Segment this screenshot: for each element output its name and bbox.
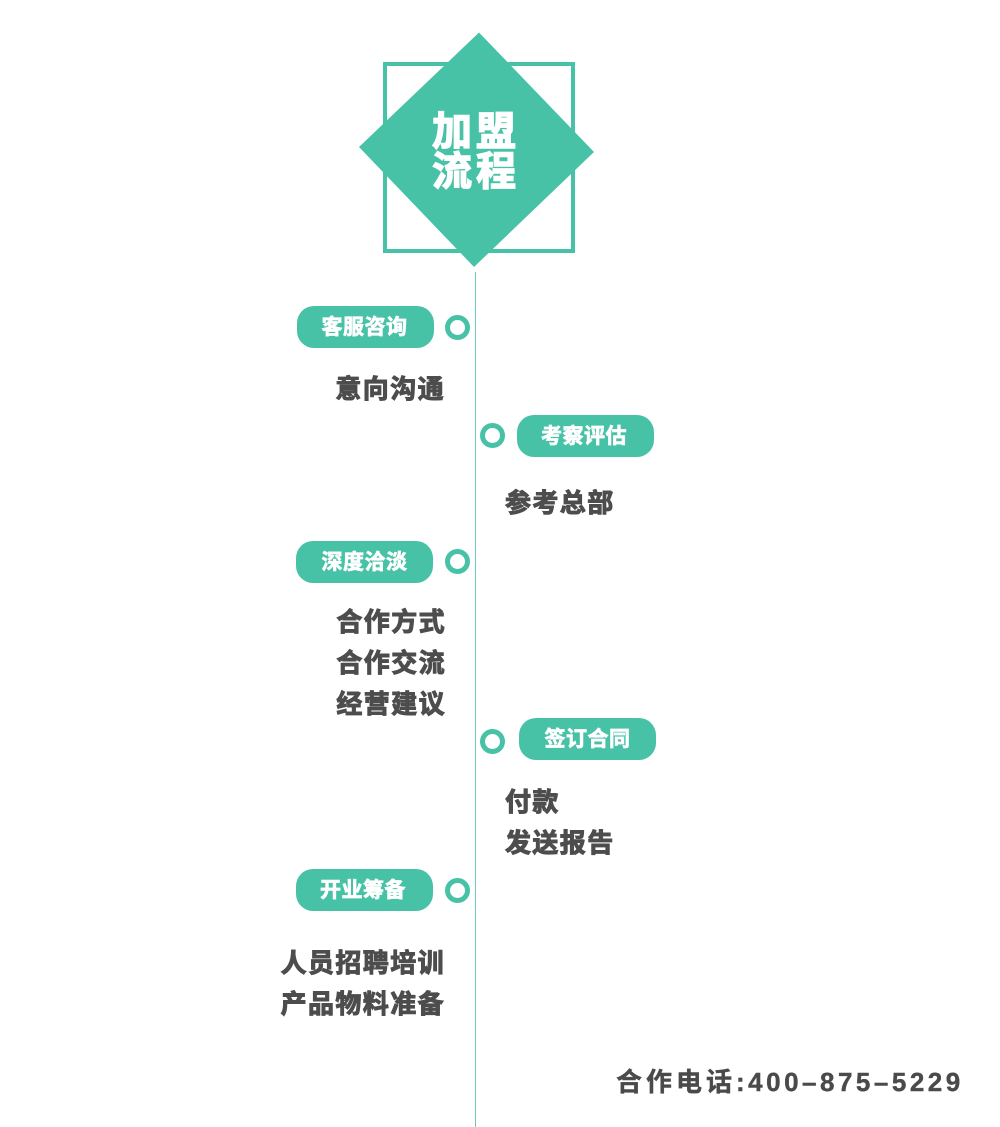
title: 流程 <box>432 150 520 194</box>
title badge <box>359 32 594 267</box>
step 5 text: 人员招聘培训 <box>281 948 445 978</box>
step 1 text: 意向沟通 <box>335 374 445 404</box>
step 4 pill <box>519 718 656 760</box>
step 4 text <box>504 787 615 858</box>
step 3 pill <box>296 541 433 583</box>
center timeline line <box>475 272 476 1127</box>
title: 加盟 <box>432 110 520 154</box>
step 5 dot <box>445 878 470 903</box>
step 4 text: 付款 <box>505 787 560 817</box>
step 5 text: 产品物料准备 <box>281 989 445 1019</box>
step 3 text: 合作交流 <box>336 648 446 678</box>
step 3 text: 经营建议 <box>336 689 446 719</box>
step 5 text <box>280 948 445 1019</box>
step 2 text: 参考总部 <box>505 488 615 518</box>
contact phone: 合作电话:400–875–5229 <box>616 1067 964 1097</box>
step 3 text: 合作方式 <box>336 607 446 637</box>
step 1 dot <box>445 315 470 340</box>
step 3 pill: 深度洽淡 <box>322 551 408 574</box>
step 2 pill <box>517 415 654 457</box>
step 4 pill: 签订合同 <box>544 728 630 751</box>
title <box>432 110 520 194</box>
step 4 dot <box>480 729 505 754</box>
step 2 dot <box>480 423 505 448</box>
step 3 text <box>336 607 446 719</box>
step 1 pill <box>297 306 434 348</box>
step 5 pill: 开业筹备 <box>320 879 406 902</box>
step 2 pill: 考察评估 <box>541 425 627 448</box>
step 1 pill: 客服咨询 <box>322 316 408 339</box>
step 3 dot <box>445 549 470 574</box>
step 5 pill <box>296 869 432 911</box>
step 4 text: 发送报告 <box>505 828 615 858</box>
